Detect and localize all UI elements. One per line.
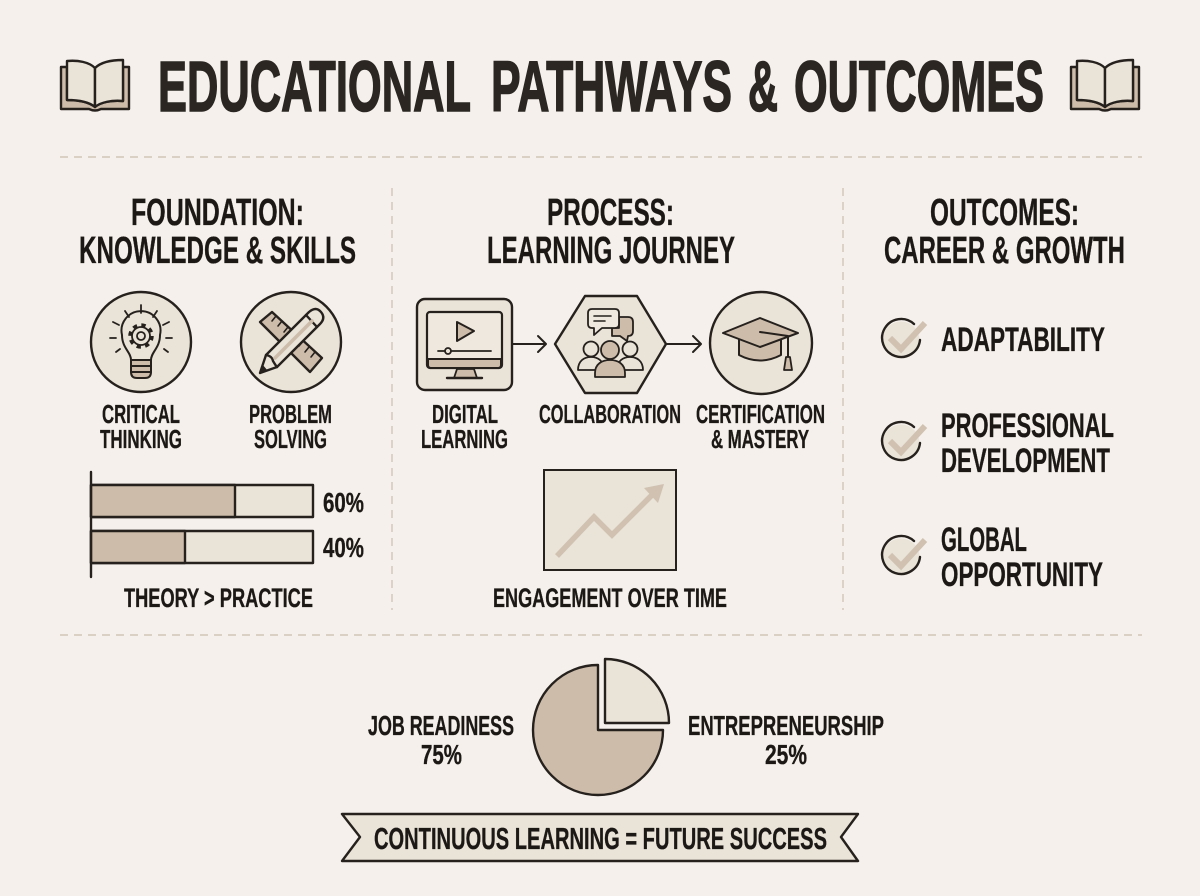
label: entrepreneurship: 25% (765, 739, 807, 770)
title (158, 48, 1044, 127)
label: problem solving: PROBLEM (249, 401, 332, 429)
icon: graduation cap (710, 292, 812, 394)
heading: foundation (79, 192, 356, 272)
label: collaboration: COLLABORATION (539, 401, 681, 429)
label: problem solving: SOLVING (254, 426, 327, 454)
label: critical thinking: CRITICAL (102, 401, 180, 429)
banner: continuous learning (342, 814, 858, 861)
label: critical thinking (100, 401, 182, 454)
label: certification and mastery (696, 401, 825, 454)
heading: outcomes: OUTCOMES: (930, 192, 1079, 234)
pie chart: job readiness vs entrepreneurship (533, 659, 669, 795)
caption: engagement over time: ENGAGEMENT OVER TIME (493, 583, 727, 613)
panel: outcomes (882, 192, 1125, 594)
label: entrepreneurship: ENTREPRENEURSHIP (688, 710, 884, 741)
title: PATHWAYS (491, 48, 732, 127)
title: OUTCOMES (794, 48, 1044, 127)
item: global opportunity (882, 521, 1103, 594)
label: certification and mastery: & MASTERY (711, 426, 809, 454)
item: adaptability: ADAPTABILITY (941, 321, 1105, 359)
caption: theory greater than practice: THEORY > PRACTICE (124, 583, 313, 613)
arrow: collaboration to certification (666, 336, 701, 352)
heading: outcomes (884, 192, 1125, 272)
heading: foundation: KNOWLEDGE & SKILLS (79, 230, 356, 272)
title: EDUCATIONAL (158, 48, 471, 127)
item: professional development (882, 407, 1114, 480)
label: digital learning: LEARNING (421, 426, 508, 454)
label: job readiness: 75% (421, 739, 462, 770)
icon: collaboration hexagon (555, 296, 666, 393)
panel: process (417, 192, 825, 613)
heading: foundation: FOUNDATION: (131, 192, 304, 234)
item: global opportunity: GLOBAL (941, 521, 1027, 559)
bar chart: theory vs practice: 60% (323, 487, 364, 518)
icon: digital learning monitor (417, 299, 512, 390)
arrow: digital to collaboration (512, 336, 546, 352)
heading: process (487, 192, 735, 272)
heading: process: LEARNING JOURNEY (487, 230, 735, 272)
label: digital learning: DIGITAL (432, 401, 498, 429)
item: professional development: DEVELOPMENT (941, 442, 1110, 480)
label: job readiness: JOB READINESS (368, 710, 514, 741)
icon: open book right (1071, 60, 1139, 110)
panel: foundation (79, 192, 364, 613)
label: problem solving (249, 401, 332, 454)
bar chart: theory vs practice (91, 472, 364, 577)
label: job readiness (368, 710, 514, 770)
label: critical thinking: THINKING (100, 426, 182, 454)
icon: light bulb with gear (91, 292, 191, 392)
banner: continuous learning: CONTINUOUS LEARNING = FUTURE SUCCESS (374, 821, 827, 856)
label: digital learning (421, 401, 508, 454)
bar chart: theory vs practice: 40% (323, 532, 364, 563)
label: certification and mastery: CERTIFICATION (696, 401, 825, 429)
item: adaptability (882, 319, 1105, 359)
icon: pencil and ruler (241, 292, 341, 392)
line chart: engagement over time (544, 470, 676, 570)
icon: open book left (61, 60, 129, 110)
title: & (748, 48, 778, 127)
item: global opportunity: OPPORTUNITY (941, 556, 1103, 594)
heading: process: PROCESS: (547, 192, 674, 234)
label: entrepreneurship (688, 710, 884, 770)
